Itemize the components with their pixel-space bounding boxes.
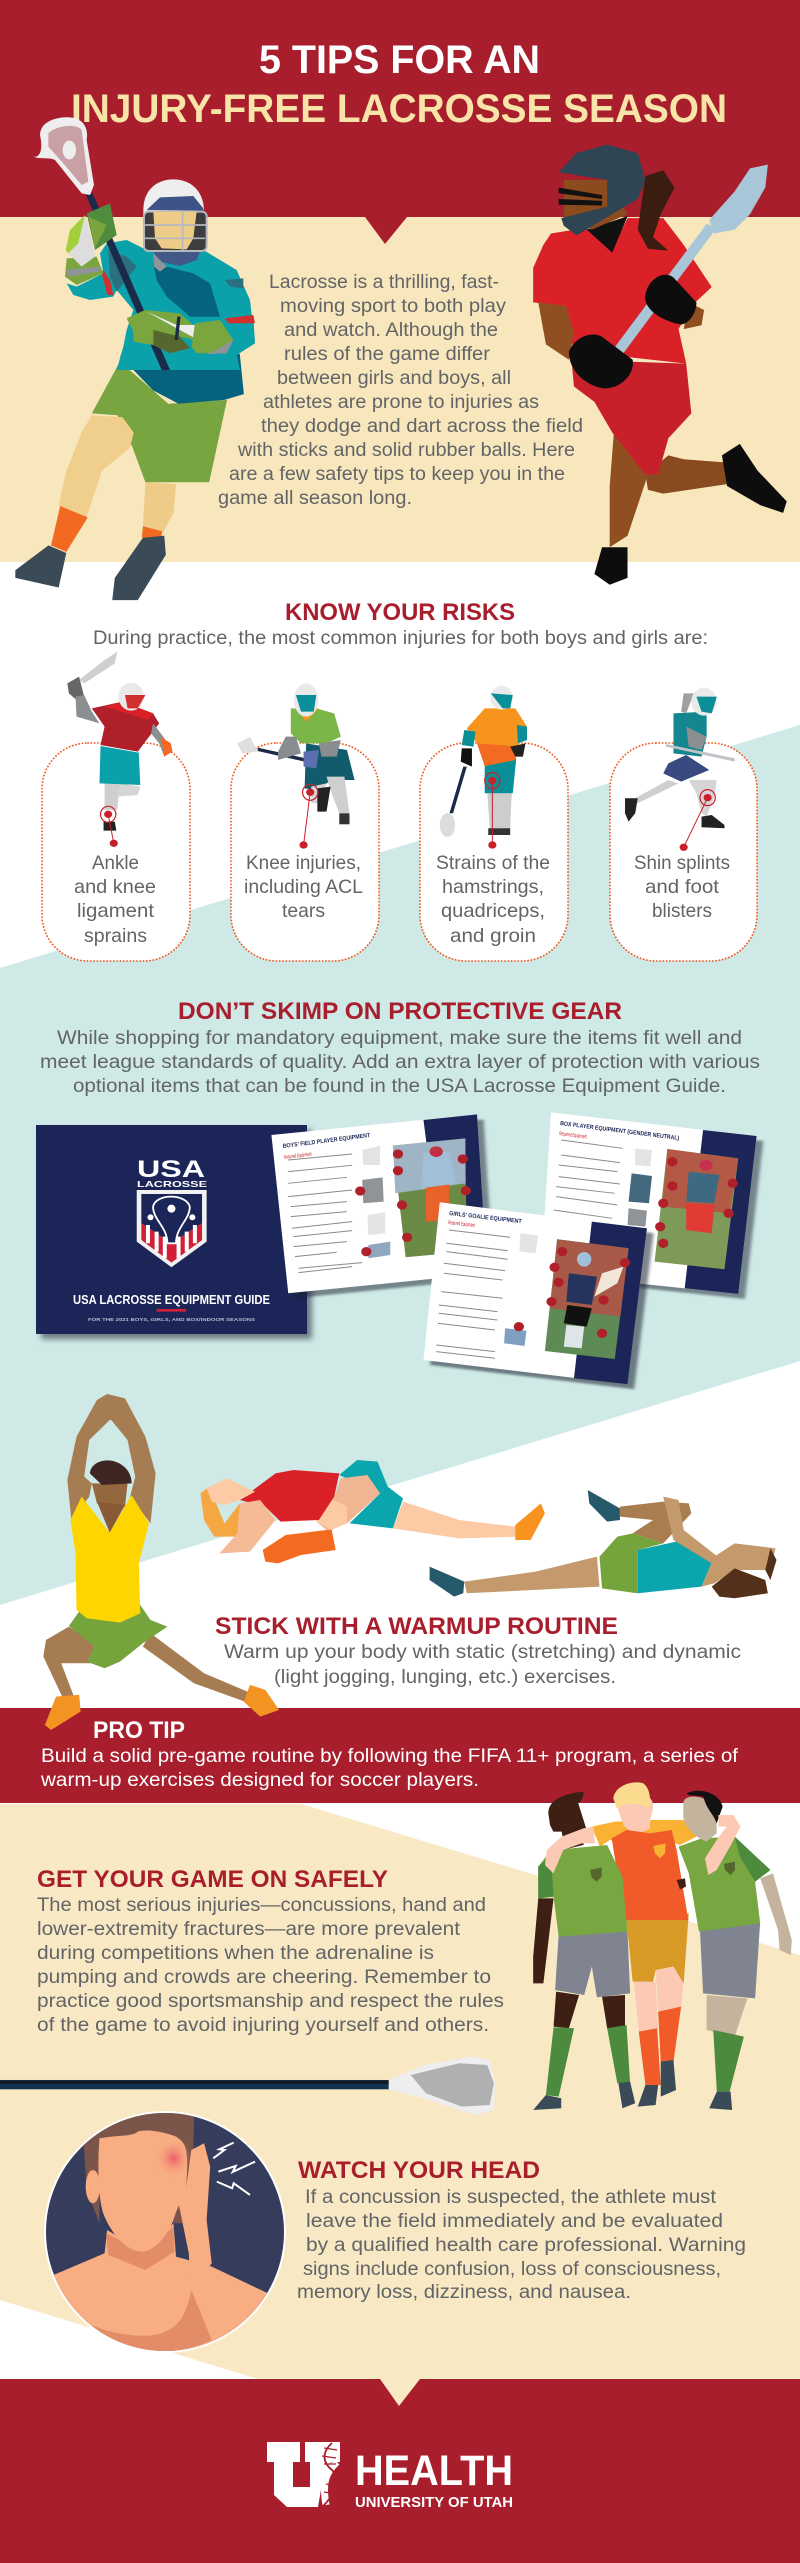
shoes overlapping band	[45, 1685, 279, 1730]
footer notch arrow	[380, 2379, 420, 2406]
equipment guide cover: LACROSSE	[137, 1179, 207, 1189]
text: game on safely	[37, 1895, 504, 2036]
heads and arms	[545, 1791, 741, 1889]
heading: protective gear: DON’T SKIMP ON PROTECTIVE GEAR	[178, 998, 622, 1025]
intro text: Lacrosse is a thrilling, fast-	[269, 272, 499, 293]
illustration: three players	[533, 1782, 792, 2110]
panel: pro tip	[0, 1685, 800, 1803]
lower cream diagonal background	[0, 1804, 800, 2379]
text: game on safely: practice good sportsmanship and respect the rules	[37, 1991, 504, 2012]
text: watch your head: by a qualified health care professional. Warning	[306, 2235, 746, 2256]
equipment guide cover: FOR THE 2021 BOYS, GIRLS, AND BOX/INDOOR SEASONS	[88, 1317, 255, 1322]
text: game on safely: during competitions when the adrenaline is	[37, 1943, 434, 1964]
card: ankle: sprains	[84, 925, 147, 947]
panel: pro tip: Build a solid pre-game routine by following the FIFA 11+ program, a series of	[41, 1746, 739, 1767]
title	[71, 38, 727, 131]
equipment page: girls' goalie: Required Equipment	[448, 1220, 476, 1229]
panel: pro tip: warm-up exercises designed for soccer players.	[40, 1770, 479, 1791]
card: strains: hamstrings,	[442, 876, 544, 898]
logo: University of Utah Health	[267, 2442, 513, 2511]
heading: watch your head: WATCH YOUR HEAD	[298, 2157, 540, 2184]
panel: injury cards	[42, 743, 757, 961]
text: protective gear: meet league standards of quality. Add an extra layer of protection with various	[40, 1052, 760, 1073]
card: knee: tears	[282, 900, 325, 922]
text: warmup: Warm up your body with static (stretching) and dynamic	[224, 1642, 741, 1663]
equipment page: boys' field player: BOYS’ FIELD PLAYER EQUIPMENT	[282, 1133, 371, 1150]
card: shin: Shin splints	[634, 852, 730, 874]
text: game on safely: lower-extremity fractures—are more prevalent	[37, 1919, 461, 1940]
text: game on safely: of the game to avoid injuring yourself and others.	[37, 2015, 489, 2036]
equipment page: boys' field player: Required Equipment	[283, 1151, 312, 1161]
text: know your risks intro: During practice, the most common injuries for both boys and girls are:	[93, 628, 708, 649]
text: protective gear: While shopping for mandatory equipment, make sure the items fit well and	[57, 1028, 742, 1049]
logo: University of Utah Health: HEALTH	[355, 2447, 513, 2495]
illustration: head injury circle	[45, 2110, 285, 2357]
equipment page: box player: Required Equipment	[559, 1131, 588, 1141]
equipment guide cover: USA LACROSSE EQUIPMENT GUIDE	[73, 1293, 270, 1307]
intro cream panel	[0, 217, 800, 562]
equipment page: box player: BOX PLAYER EQUIPMENT (GENDER NEUTRAL)	[560, 1121, 680, 1142]
card: shin: blisters	[652, 900, 712, 922]
card: knee	[231, 743, 379, 961]
intro text: with sticks and solid rubber balls. Here	[237, 440, 575, 461]
heading: know your risks: KNOW YOUR RISKS	[285, 599, 515, 626]
illustration: player in teal with shin marker	[625, 688, 735, 851]
text: game on safely: pumping and crowds are cheering. Remember to	[37, 1967, 491, 1988]
illustration: male lacrosse player	[15, 117, 255, 600]
card: knee: Knee injuries,	[246, 852, 361, 874]
equipment page: box player	[541, 1112, 763, 1299]
intro text: between girls and boys, all	[277, 368, 511, 389]
heading: warmup: STICK WITH A WARMUP ROUTINE	[215, 1613, 618, 1640]
card: strains	[420, 743, 568, 961]
text: warmup: (light jogging, lunging, etc.) exercises.	[274, 1667, 616, 1688]
text: watch your head: If a concussion is suspected, the athlete must	[305, 2187, 717, 2208]
intro text: and watch. Although the	[284, 320, 498, 341]
upper body	[33, 117, 255, 370]
heading: game on safely: GET YOUR GAME ON SAFELY	[37, 1866, 388, 1893]
text: watch your head: leave the field immediately and be evaluated	[306, 2211, 723, 2232]
title: 5 TIPS FOR AN	[259, 38, 540, 82]
equipment page: boys' field player	[271, 1114, 494, 1298]
text: game on safely: The most serious injuries—concussions, hand and	[37, 1895, 486, 1916]
illustration: standing stretch figure	[43, 1394, 279, 1730]
intro text: are a few safety tips to keep you in the	[229, 464, 565, 485]
illustration: lacrosse stick	[0, 2057, 495, 2115]
illustration: player in orange with thigh marker	[440, 686, 527, 849]
card: ankle: and knee	[74, 876, 156, 898]
card: ankle	[42, 743, 190, 961]
intro text: game all season long.	[218, 488, 412, 509]
card: shin: and foot	[645, 876, 720, 898]
left player body	[533, 1837, 792, 2110]
illustration: player in red with ankle marker	[67, 652, 172, 847]
icon: U with DNA helix	[267, 2442, 340, 2507]
card: strains: quadriceps,	[441, 900, 545, 922]
card: strains: Strains of the	[436, 852, 550, 874]
illustration: female lacrosse player	[533, 145, 787, 585]
text: warmup	[224, 1642, 741, 1688]
equipment guide cover	[36, 1125, 312, 1339]
card: knee: including ACL	[244, 876, 363, 898]
text: watch your head	[297, 2187, 746, 2303]
footer band	[0, 2379, 800, 2563]
text: watch your head: memory loss, dizziness, and nausea.	[297, 2282, 631, 2303]
panel: pro tip: PRO TIP	[93, 1717, 185, 1744]
title: INJURY-FREE LACROSSE SEASON	[71, 87, 727, 131]
logo shield	[137, 1190, 207, 1312]
card: shin	[610, 743, 757, 961]
illustration: figure lying hugging knee	[430, 1490, 777, 1598]
card: ankle: ligament	[77, 900, 155, 922]
intro text: they dodge and dart across the field	[261, 416, 583, 437]
center player upper	[592, 1782, 697, 1920]
illustration: figure lying with knee bent	[201, 1460, 545, 1563]
text: watch your head: signs include confusion, loss of consciousness,	[303, 2259, 721, 2280]
illustration: player in green with knee marker	[237, 683, 355, 849]
center player legs	[627, 1913, 689, 2107]
header notch arrow	[365, 217, 407, 244]
header band	[0, 0, 800, 217]
lower body	[15, 344, 244, 600]
intro text: athletes are prone to injuries as	[263, 392, 539, 413]
equipment page: girls' goalie: GIRLS’ GOALIE EQUIPMENT	[449, 1211, 522, 1225]
intro text	[218, 272, 583, 509]
logo: University of Utah Health: UNIVERSITY OF UTAH	[355, 2494, 513, 2511]
teal diagonal background	[0, 725, 800, 1605]
lightning marks	[213, 2143, 255, 2195]
intro text: moving sport to both play	[280, 296, 507, 317]
equipment page: girls' goalie	[423, 1202, 654, 1389]
card: strains: and groin	[450, 925, 536, 947]
equipment guide cover: USA	[137, 1156, 205, 1183]
text: protective gear: optional items that can be found in the USA Lacrosse Equipment Guide.	[73, 1076, 726, 1097]
card: ankle: Ankle	[92, 852, 139, 874]
text: protective gear	[40, 1028, 760, 1097]
intro text: rules of the game differ	[284, 344, 491, 365]
